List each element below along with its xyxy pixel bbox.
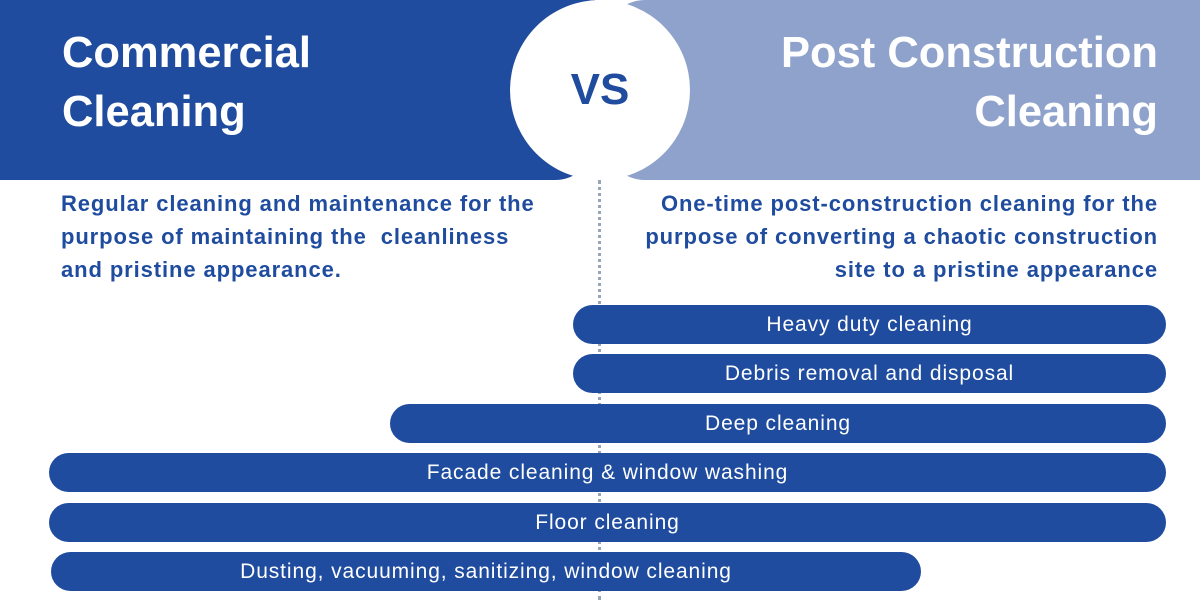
bar: deep cleaning xyxy=(390,404,1166,443)
text: post construction description: One-time post-construction cleaning for the purpose of converting a chaotic construction site to a pristine appearance xyxy=(645,191,1158,282)
text: commercial description: purpose of maintaining the cleanliness xyxy=(61,224,509,249)
bar: heavy duty cleaning xyxy=(573,305,1166,344)
bar: debris removal: Debris removal and disposal xyxy=(725,362,1014,385)
panel: commercial header xyxy=(0,0,595,180)
vs circle xyxy=(510,0,690,180)
text: commercial description xyxy=(61,191,535,282)
bar: facade cleaning xyxy=(49,453,1166,492)
bar: heavy duty cleaning: Heavy duty cleaning xyxy=(766,313,973,336)
heading: commercial cleaning: Cleaning xyxy=(62,88,246,136)
bar: floor cleaning xyxy=(49,503,1166,542)
divider dotted line xyxy=(598,180,601,600)
bar: facade cleaning: Facade cleaning & window washing xyxy=(427,461,788,484)
vs circle: VS xyxy=(571,65,629,114)
bar: dusting: Dusting, vacuuming, sanitizing, window cleaning xyxy=(240,560,732,583)
bar: debris removal xyxy=(573,354,1166,393)
bar: dusting xyxy=(51,552,921,591)
heading: post construction cleaning xyxy=(781,29,1158,136)
heading: commercial cleaning xyxy=(62,29,311,136)
bar: floor cleaning: Floor cleaning xyxy=(535,511,680,534)
panel: post construction header xyxy=(605,0,1200,180)
text: commercial description: Regular cleaning and maintenance for the xyxy=(61,191,535,216)
heading: commercial cleaning: Commercial xyxy=(62,29,311,77)
heading: post construction cleaning: Post Construction xyxy=(781,29,1158,77)
bar: deep cleaning: Deep cleaning xyxy=(705,412,851,435)
heading: post construction cleaning: Cleaning xyxy=(974,88,1158,136)
text: commercial description: and pristine appearance. xyxy=(61,257,342,282)
